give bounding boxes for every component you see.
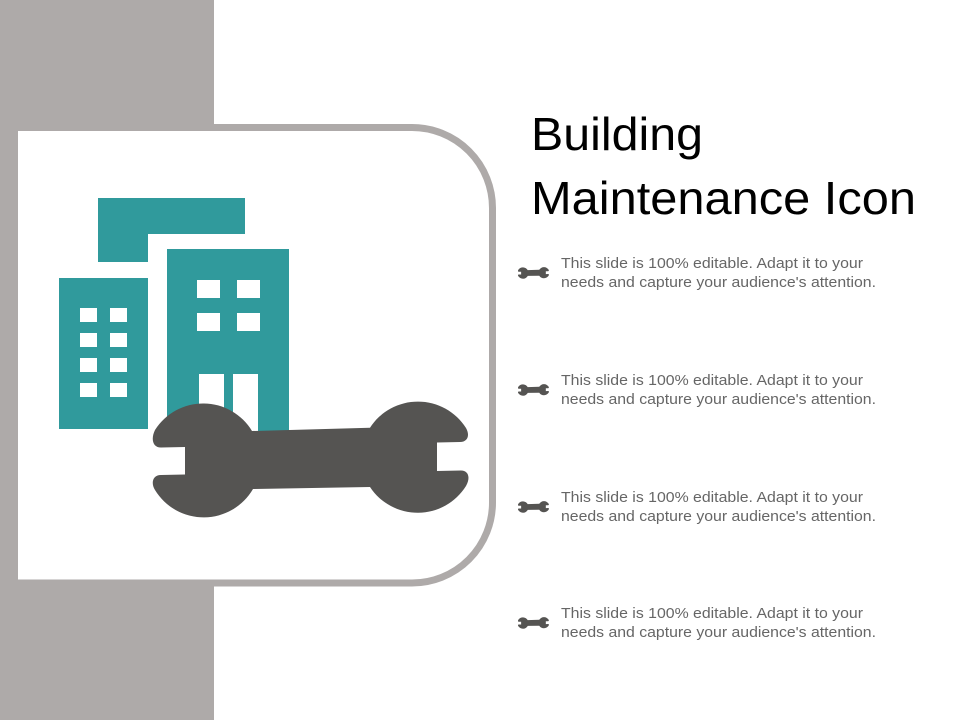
building: rear block	[98, 198, 245, 262]
body text: This slide is 100% editable. Adapt it to your	[561, 490, 863, 506]
icon: small wrench	[518, 617, 549, 629]
icon: small wrench	[518, 267, 549, 279]
body text: needs and capture your audience's attention.	[561, 275, 876, 291]
list item 2	[518, 373, 876, 408]
icon: small wrench	[518, 384, 549, 396]
body text: needs and capture your audience's attention.	[561, 625, 876, 641]
body text: needs and capture your audience's attention.	[561, 509, 876, 525]
list item 4	[518, 606, 876, 641]
building: left tower	[59, 278, 148, 429]
body text: This slide is 100% editable. Adapt it to your	[561, 256, 863, 272]
panel: rounded icon card	[18, 128, 492, 583]
body text: This slide is 100% editable. Adapt it to your	[561, 373, 863, 389]
list item 1	[518, 256, 876, 291]
body text: needs and capture your audience's attention.	[561, 392, 876, 408]
icon: building and wrench	[59, 198, 468, 517]
building: front tower	[167, 249, 289, 431]
list item 3	[518, 490, 876, 525]
grey side band	[0, 0, 214, 720]
icon: small wrench	[518, 501, 549, 513]
title: Maintenance Icon	[531, 172, 916, 224]
title: Building	[531, 108, 703, 160]
body text: This slide is 100% editable. Adapt it to your	[561, 606, 863, 622]
title	[531, 108, 916, 224]
icon: large wrench	[153, 402, 468, 517]
